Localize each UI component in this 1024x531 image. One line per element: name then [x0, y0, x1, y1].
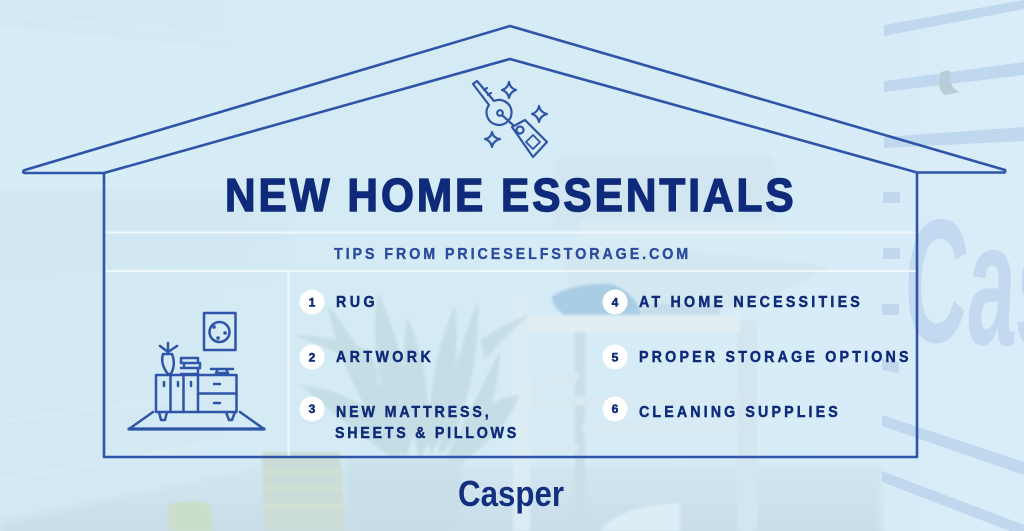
house outline [23, 26, 1005, 457]
pot [345, 458, 465, 531]
list item 5: PROPER STORAGE OPTIONS [639, 350, 909, 366]
Casper logo: Casper [458, 473, 564, 514]
icon: furniture with rug and artwork [129, 313, 264, 429]
plant [290, 292, 530, 462]
list item 4: AT HOME NECESSITIES [639, 295, 860, 311]
list item 3 [300, 396, 516, 442]
list item 1: 1 [309, 296, 316, 310]
list item 5: 5 [612, 350, 619, 364]
chair back and cushions [513, 157, 830, 531]
icon: keys with tag and sparkles [473, 81, 547, 157]
list item 4 [602, 290, 860, 314]
list item 2 [300, 344, 431, 370]
title: NEW HOME ESSENTIALS [225, 170, 794, 221]
list item 3: SHEETS & PILLOWS [335, 426, 516, 442]
list item 6 [602, 396, 838, 422]
books and tape on floor [168, 452, 345, 531]
floor [0, 466, 882, 531]
list item 2: 2 [309, 350, 316, 364]
list item 3: 3 [309, 402, 316, 416]
list item 3: NEW MATTRESS, [336, 405, 489, 421]
list item 6: CLEANING SUPPLIES [639, 405, 838, 421]
white divider lines [104, 232, 916, 456]
window on left wall [0, 15, 290, 480]
subtitle: TIPS FROM PRICESELFSTORAGE.COM [334, 247, 688, 263]
list item 2: ARTWORK [336, 350, 431, 366]
list item 5 [602, 344, 909, 370]
list item 4: 4 [612, 296, 619, 310]
list item 6: 6 [612, 402, 619, 416]
blinds on the right [882, 0, 1024, 531]
list item 1: RUG [336, 295, 375, 311]
list item 1 [300, 290, 375, 314]
